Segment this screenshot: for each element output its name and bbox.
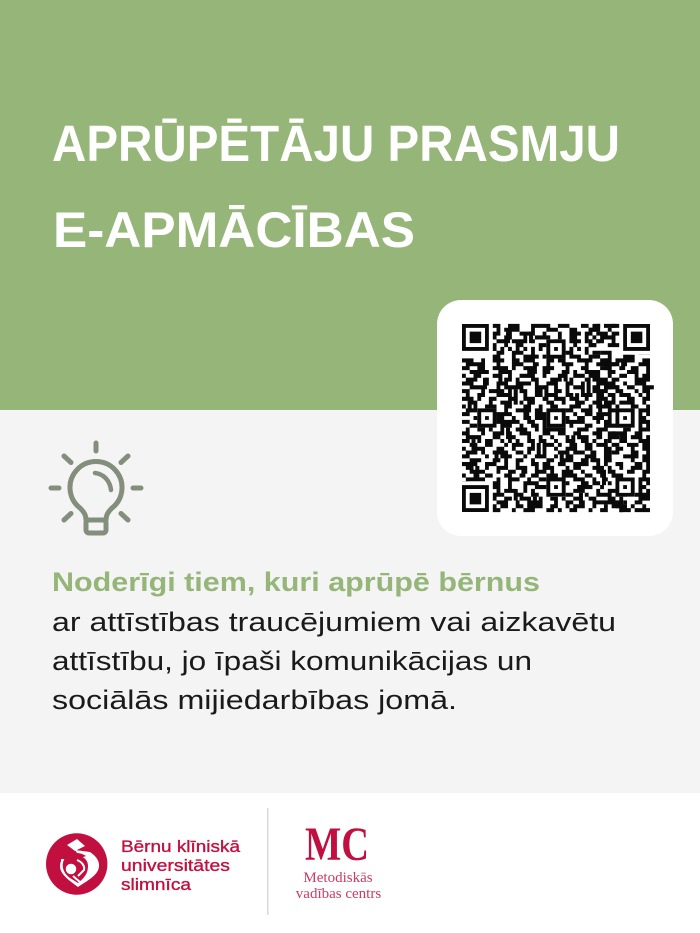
logo: children's hospital: [46, 833, 241, 895]
header panel: [0, 0, 700, 410]
description text: [52, 567, 616, 715]
hospital name: Bērnu klīniskā: [121, 837, 241, 856]
title: APRŪPĒTĀJU PRASMJU: [52, 115, 620, 172]
content panel: [0, 410, 700, 793]
title: E-APMĀCĪBAS: [53, 202, 415, 258]
footer divider: [267, 808, 268, 915]
logo emblem: [46, 833, 107, 895]
highlighted lead line: Noderīgi tiem, kuri aprūpē bērnus: [52, 567, 540, 597]
MC monogram: MC: [305, 818, 369, 871]
title: [52, 115, 620, 258]
logo: methodology centre: Metodiskās: [303, 870, 373, 886]
hospital name: universitātes: [121, 856, 230, 875]
footer panel: [0, 793, 700, 933]
logo: methodology centre: vadības centrs: [296, 886, 381, 902]
QR filler blocks: [470, 332, 623, 508]
description text: ar attīstības traucējumiem vai aizkavētu: [52, 607, 616, 637]
QR right-hand modules: [585, 326, 654, 510]
hospital name: [121, 837, 241, 894]
description text: sociālās mijiedarbības jomā.: [52, 685, 457, 715]
description text: attīstību, jo īpaši komunikācijas un: [52, 646, 532, 676]
QR code card: [437, 300, 673, 536]
hospital name: slimnīca: [121, 875, 192, 894]
logo: methodology centre: [296, 818, 381, 902]
icon: light bulb: [51, 443, 141, 533]
